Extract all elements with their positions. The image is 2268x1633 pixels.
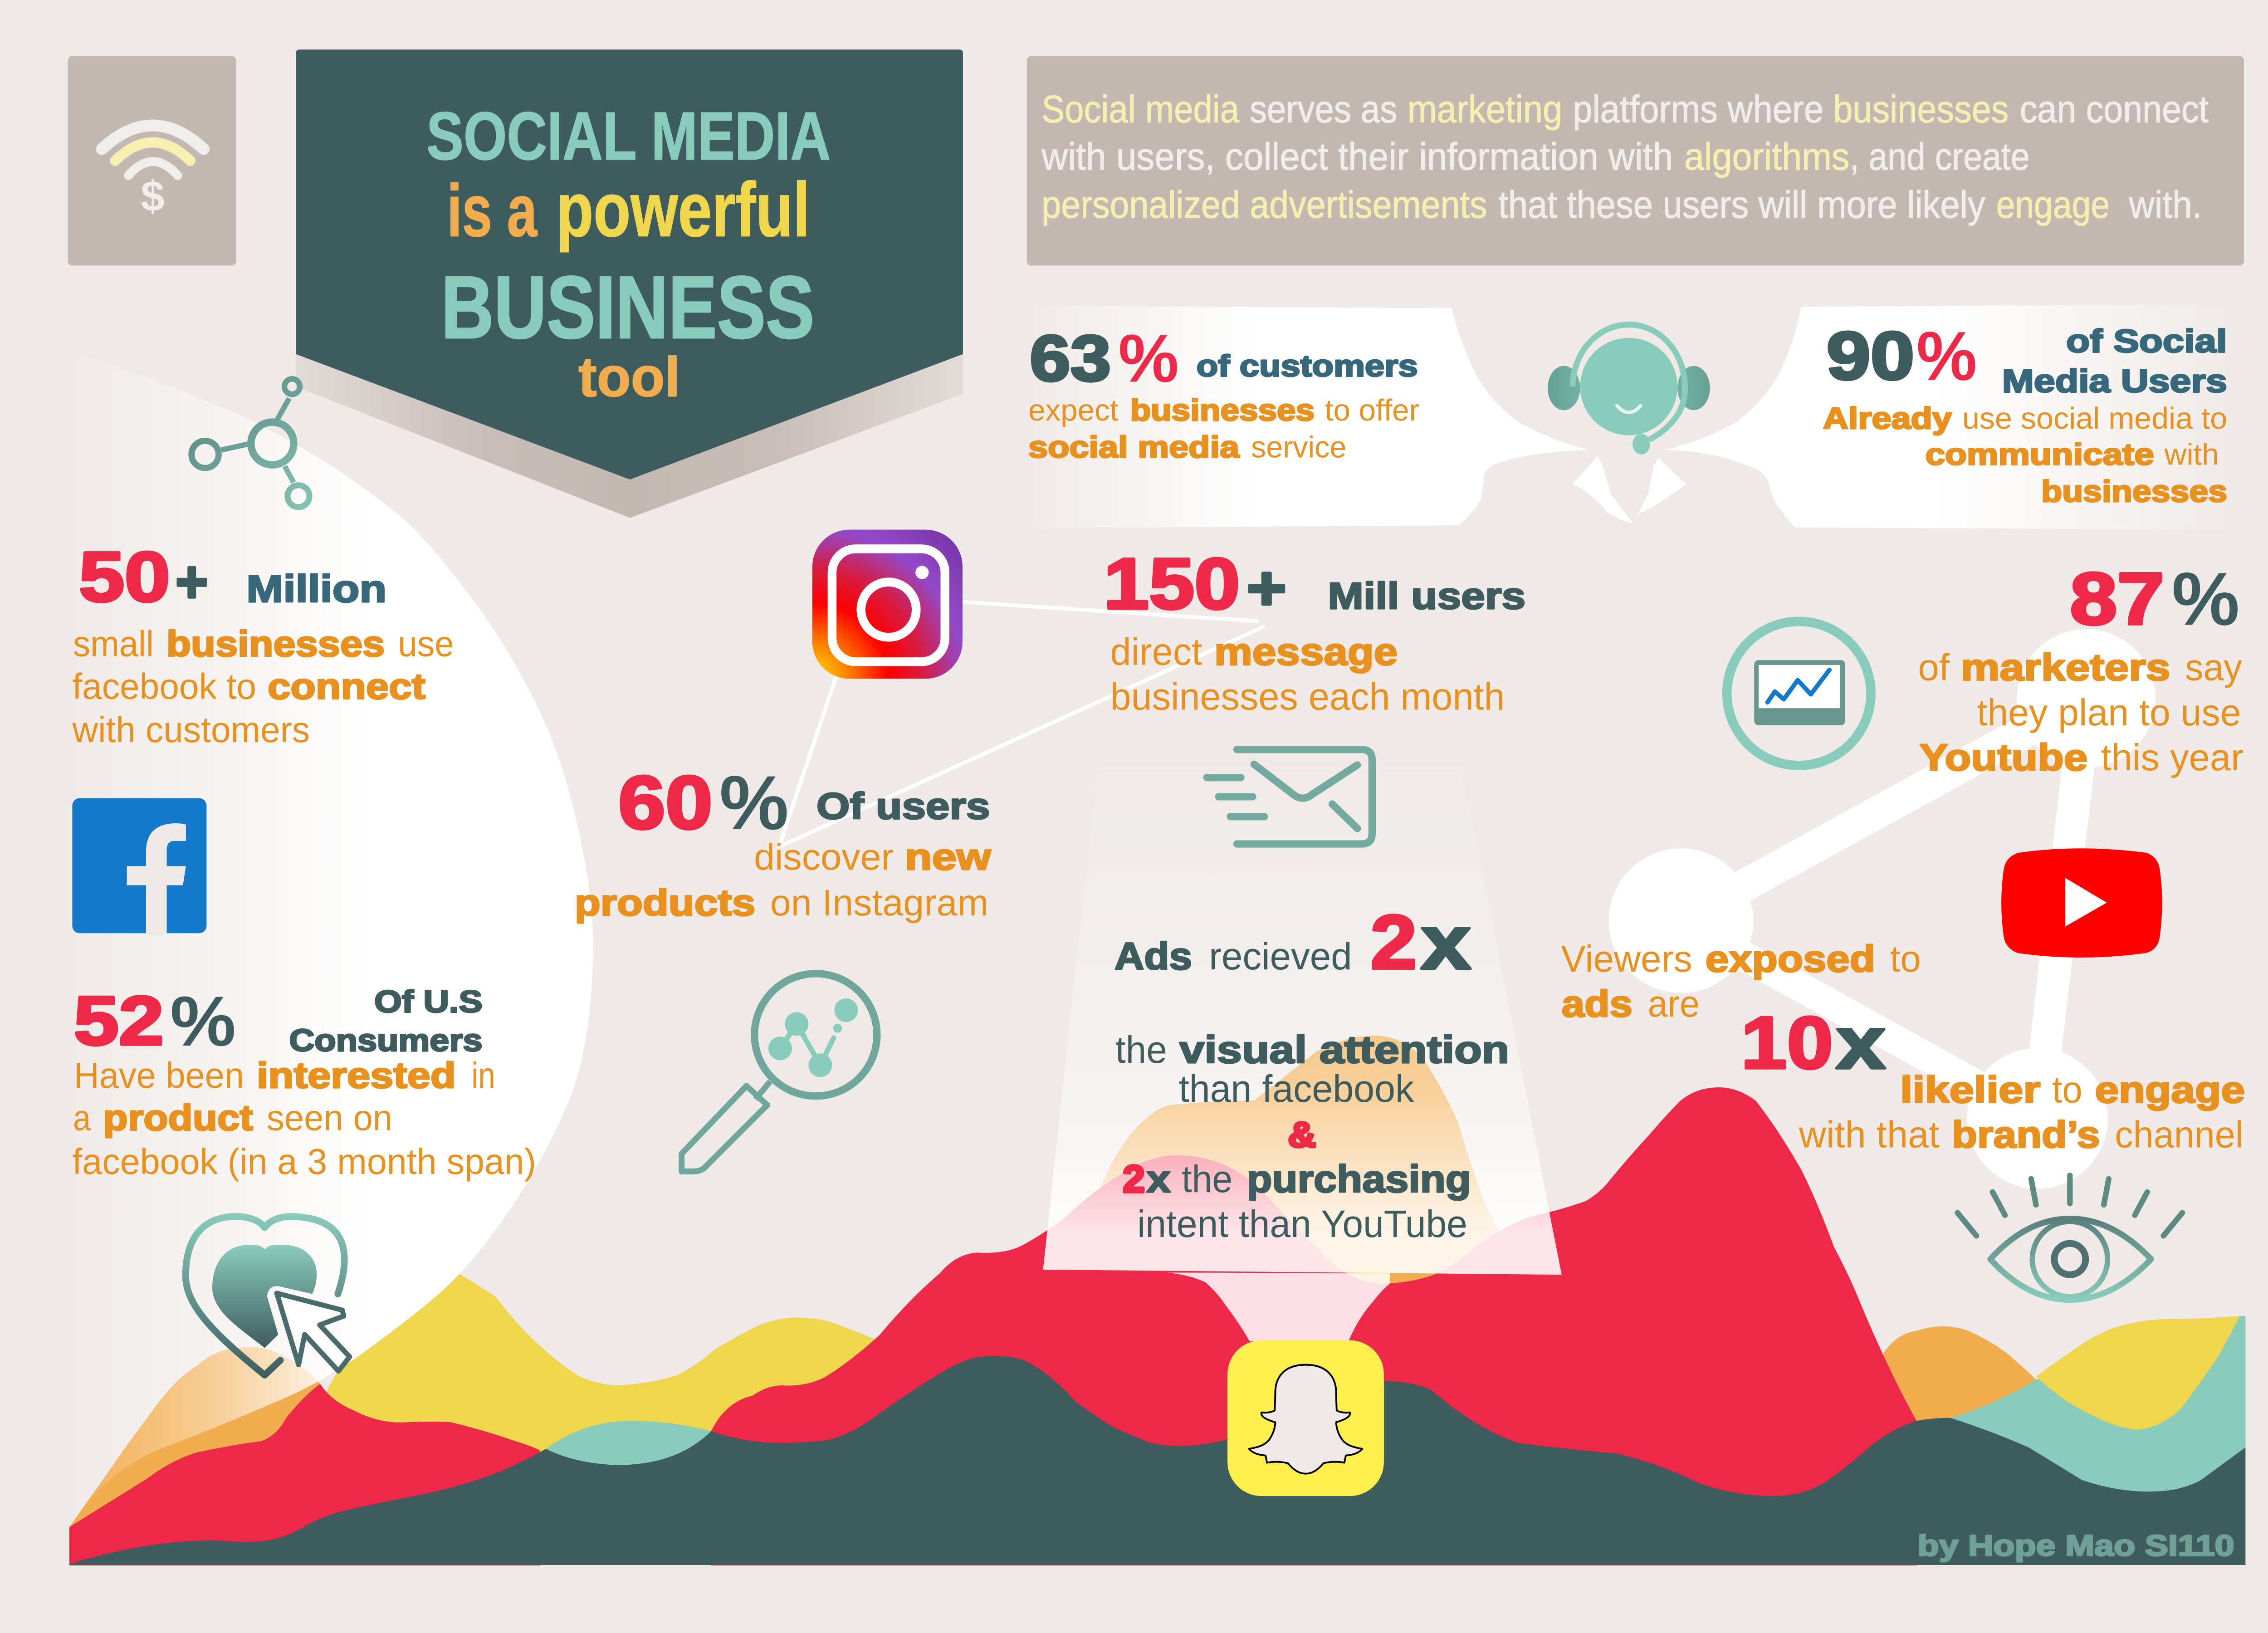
icon: youtube xyxy=(2001,848,2162,958)
intro text: algorithms xyxy=(1684,135,1849,178)
stat: 10x viewers: brand’s xyxy=(1952,1114,2100,1156)
stat: 10x viewers: to xyxy=(1890,938,1921,980)
stat: ads 2x attention: recieved xyxy=(1209,934,1352,978)
stat: 63 percent xyxy=(1028,320,1419,464)
stat: 63 percent: of customers xyxy=(1197,349,1418,383)
hills: back layer xyxy=(69,1036,2245,1542)
intro text: with users, collect their information with xyxy=(1041,135,1673,178)
beam funnel from snapchat xyxy=(1167,1272,1390,1341)
icon: network nodes xyxy=(191,379,309,507)
stat: 50+ million: + xyxy=(176,548,208,615)
stat: 63 percent: to offer xyxy=(1325,394,1419,427)
stat: 10x viewers xyxy=(1561,938,2245,1156)
stat: 52 percent: interested xyxy=(257,1055,456,1095)
stat: 87 percent: Youtube xyxy=(1920,736,2087,778)
hill: dark base xyxy=(69,1356,2245,1565)
intro text: engage xyxy=(1996,183,2110,226)
banner body xyxy=(296,49,963,479)
stat: 60 percent: 60 xyxy=(618,761,713,845)
title text: SOCIAL MEDIA xyxy=(426,98,831,174)
stat: 87 percent: of xyxy=(1918,646,1950,688)
shirt collar xyxy=(1573,456,1686,524)
stat: 50+ million: Million xyxy=(246,567,386,610)
icon: facebook xyxy=(72,798,206,933)
stat: 150+ million users xyxy=(1104,543,1525,718)
stat: 10x viewers: 10 xyxy=(1741,1002,1833,1084)
stat: 90 percent: 90 xyxy=(1827,318,1915,394)
stat: 87 percent: 87 xyxy=(2070,558,2164,640)
intro text: serves as xyxy=(1250,87,1397,130)
icon: wifi dollar tile xyxy=(68,56,236,265)
stat: ads 2x attention: than facebook xyxy=(1179,1067,1414,1110)
stat: 63 percent: % xyxy=(1118,320,1179,396)
footer credit: by Hope Mao SI110 xyxy=(1918,1529,2234,1562)
beam panel behind ads text xyxy=(1043,738,1562,1275)
icon: instagram xyxy=(812,530,963,679)
stat: ads 2x attention: x xyxy=(1146,1157,1171,1200)
hill: right orange xyxy=(1866,1326,2038,1438)
stat: 60 percent xyxy=(575,760,991,924)
stat: 50+ million xyxy=(72,538,454,750)
stat: 63 percent: expect xyxy=(1028,394,1119,427)
speech panel: right xyxy=(1665,304,2235,530)
speech panel: left xyxy=(1026,305,1589,528)
stat: 150+ million users: Mill users xyxy=(1328,575,1525,617)
intro text: platforms where xyxy=(1573,87,1823,130)
stat: 10x viewers: Viewers xyxy=(1561,938,1692,980)
stat: 60 percent: discover xyxy=(754,836,894,878)
stat: 10x viewers: channel xyxy=(2115,1114,2244,1156)
stat: 52 percent: Consumers xyxy=(289,1023,483,1058)
icon: snapchat xyxy=(1227,1340,1384,1496)
stat: 10x viewers: to xyxy=(2052,1069,2082,1111)
intro text: personalized advertisements xyxy=(1041,183,1487,226)
stat: ads 2x attention: visual attention xyxy=(1179,1028,1509,1071)
icon: eye xyxy=(1957,1175,2182,1300)
stat: 90 percent: communicate xyxy=(1926,438,2154,472)
stat: 90 percent: Media Users xyxy=(2002,363,2227,400)
stat: 90 percent: with xyxy=(2164,438,2219,472)
intro text: businesses xyxy=(1833,87,2009,130)
stat: ads 2x attention xyxy=(1114,899,1509,1245)
title text xyxy=(426,98,831,409)
stat: 60 percent: % xyxy=(719,760,789,846)
stat: 52 percent: in xyxy=(471,1055,495,1095)
intro panel xyxy=(1027,56,2244,265)
hill: left red xyxy=(69,1384,540,1565)
smile xyxy=(1617,406,1641,412)
stat: 52 percent: Of U.S xyxy=(374,984,483,1019)
stat: ads 2x attention: & xyxy=(1288,1115,1316,1154)
stat: 10x viewers: likelier xyxy=(1900,1069,2040,1111)
intro text: Social media xyxy=(1041,87,1240,130)
stat: 50+ million: use xyxy=(398,623,454,664)
stat: 63 percent: service xyxy=(1251,430,1346,464)
stat: 52 percent: product xyxy=(103,1097,253,1138)
stat: ads 2x attention: x xyxy=(1421,899,1471,985)
stat: 50+ million: facebook to xyxy=(72,666,256,706)
stat: 90 percent: % xyxy=(1916,318,1977,395)
stat: 50+ million: 50 xyxy=(79,538,170,616)
intro text: with. xyxy=(2129,183,2202,226)
title text: is a xyxy=(447,170,538,252)
stat: 87 percent: marketers xyxy=(1961,646,2170,688)
icon: support agent headset xyxy=(1548,325,1710,524)
title text: powerful xyxy=(556,166,810,252)
stat: 60 percent: Of users xyxy=(816,786,990,827)
stat: 50+ million: businesses xyxy=(166,623,385,664)
connector lines: instagram xyxy=(779,602,1263,847)
stat: 150+ million users: businesses each month xyxy=(1110,675,1505,718)
title text: tool xyxy=(578,346,680,409)
stat: 52 percent: 52 xyxy=(74,983,164,1060)
icon: heart with cursor xyxy=(186,1217,350,1375)
hill: left yellow xyxy=(280,1269,900,1476)
stat: 52 percent: facebook (in a 3 month span) xyxy=(72,1141,536,1182)
stat: 10x viewers: exposed xyxy=(1706,938,1875,980)
stat: 90 percent xyxy=(1823,318,2227,508)
intro text: marketing xyxy=(1408,87,1562,130)
stat: ads 2x attention: 2 xyxy=(1370,899,1417,985)
intro text: can connect xyxy=(2020,87,2209,130)
head xyxy=(1580,338,1677,435)
stat: 10x viewers: ads xyxy=(1562,983,1633,1025)
hill: left orange xyxy=(69,1347,320,1542)
ear pads xyxy=(1548,366,1580,410)
hill: center orange xyxy=(1085,1036,1503,1298)
headband xyxy=(1573,325,1685,440)
stat: 52 percent xyxy=(72,982,536,1182)
stat: 63 percent: 63 xyxy=(1030,322,1111,395)
stat: 60 percent: products xyxy=(575,882,755,924)
hill: main red xyxy=(711,1087,1916,1565)
stat: 52 percent: % xyxy=(170,982,236,1061)
stat: ads 2x attention: the xyxy=(1182,1157,1232,1200)
icon: envelope xyxy=(1207,749,1372,844)
stat: 63 percent: social media xyxy=(1028,430,1240,464)
stat: 90 percent: of Social xyxy=(2066,323,2227,359)
icon: magnifier xyxy=(682,973,877,1172)
stat: 50+ million: small xyxy=(73,623,154,664)
stat: ads 2x attention: purchasing xyxy=(1246,1157,1471,1200)
stat: 10x viewers: are xyxy=(1647,983,1700,1025)
stat: 150+ million users: direct xyxy=(1110,630,1202,673)
icon: chart monitor xyxy=(1727,621,1871,765)
stat: 63 percent: businesses xyxy=(1130,394,1315,427)
stat: 87 percent: they plan to use xyxy=(1977,691,2241,733)
stat: ads 2x attention: 2 xyxy=(1123,1157,1145,1200)
stat: 150+ million users: message xyxy=(1214,630,1398,673)
icon: wifi dollar tile: $ xyxy=(141,172,165,220)
stat: 87 percent: % xyxy=(2172,557,2239,641)
stat: 52 percent: a xyxy=(73,1097,91,1138)
intro text: , and create xyxy=(1850,135,2030,178)
hills: front layer xyxy=(69,1087,2245,1565)
cursor xyxy=(277,1293,350,1371)
intro text xyxy=(1041,87,2209,226)
stat: 60 percent: new xyxy=(905,836,991,878)
stat: 87 percent: say xyxy=(2185,646,2242,688)
white glow panel: left xyxy=(69,354,593,1527)
stat: 10x viewers: x xyxy=(1836,1002,1886,1084)
title text: BUSINESS xyxy=(441,258,814,357)
stat: ads 2x attention: the xyxy=(1115,1028,1167,1071)
heart fill xyxy=(212,1245,317,1348)
stat: 10x viewers: engage xyxy=(2095,1069,2245,1111)
stat: 60 percent: on Instagram xyxy=(770,882,988,924)
stat: 52 percent: Have been xyxy=(74,1055,244,1095)
stat: 50+ million: connect xyxy=(268,666,425,706)
heart outline xyxy=(186,1217,344,1375)
hill: right yellow xyxy=(2036,1316,2239,1430)
network: white connector shapes xyxy=(1609,629,2156,1189)
stat: 87 percent: this year xyxy=(2101,736,2244,778)
stat: 90 percent: use social media to xyxy=(1962,402,2227,435)
stat: 10x viewers: with that xyxy=(1799,1114,1939,1156)
title banner xyxy=(296,49,963,518)
stat: 150+ million users: 150 xyxy=(1104,543,1240,624)
intro text: that these users will more likely xyxy=(1498,183,1985,226)
stat: 90 percent: businesses xyxy=(2041,475,2227,508)
microphone xyxy=(1633,434,1650,455)
stat: ads 2x attention: intent than YouTube xyxy=(1137,1202,1467,1245)
stat: ads 2x attention: Ads xyxy=(1114,934,1192,978)
hill: right teal xyxy=(1950,1316,2245,1512)
stat: 50+ million: with customers xyxy=(72,709,310,750)
banner shadow xyxy=(296,354,963,518)
stat: 87 percent xyxy=(1918,557,2244,778)
stat: 52 percent: seen on xyxy=(267,1097,392,1138)
stat: 90 percent: Already xyxy=(1823,402,1952,435)
stat: 150+ million users: + xyxy=(1246,553,1286,622)
hill: center teal xyxy=(546,1421,711,1483)
